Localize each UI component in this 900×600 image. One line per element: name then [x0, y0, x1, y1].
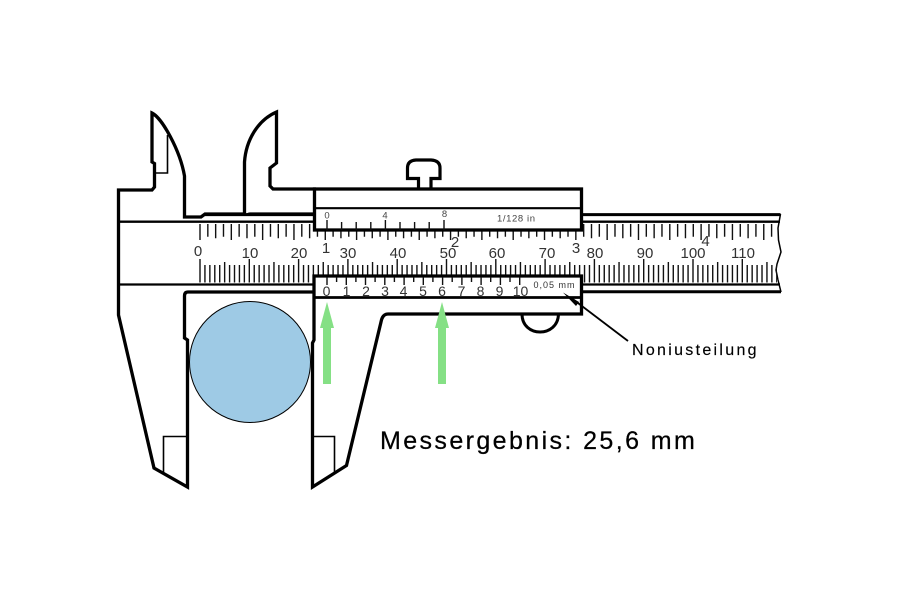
moving jaw outline: [312, 276, 582, 487]
infographic: vernier caliper reading: [116, 110, 782, 490]
vernier slide upper window: [314, 189, 582, 230]
vernier slide lower window and moving jaw: [312, 276, 582, 487]
millimetre scale numbers: 50: [440, 245, 456, 262]
label: Noniusteilung: Noniusteilung: [632, 342, 759, 359]
green arrow at vernier zero: [320, 302, 334, 384]
millimetre vernier numbers: 5: [419, 283, 427, 299]
millimetre vernier numbers: 3: [381, 283, 389, 299]
inch vernier numbers: 8: [442, 209, 447, 220]
caliper body with fixed jaws: [118, 112, 781, 487]
millimetre scale numbers: 30: [340, 245, 356, 262]
millimetre vernier numbers: 10: [513, 283, 528, 299]
millimetre scale numbers: 20: [291, 245, 307, 262]
millimetre vernier numbers: 6: [438, 283, 446, 299]
inch scale numbers: 1: [322, 240, 330, 257]
moving jaw detail: [312, 436, 334, 474]
inch scale numbers: 3: [572, 240, 580, 257]
leader arrow to vernier scale: [563, 292, 628, 341]
millimetre scale numbers: 0: [194, 243, 202, 260]
inch scale numbers: [322, 233, 710, 257]
upper window divider: [314, 207, 582, 209]
millimetre vernier numbers: 8: [477, 283, 485, 299]
depth slider loop: [522, 314, 558, 332]
millimetre vernier ticks: [327, 277, 520, 285]
millimetre scale numbers: 110: [731, 245, 755, 262]
lower window divider: [314, 296, 582, 299]
millimetre scale numbers: 60: [489, 245, 505, 262]
fixed jaw outline: [118, 113, 314, 487]
sliding thumb knob: [408, 160, 440, 189]
millimetre vernier numbers: 4: [400, 283, 408, 299]
ruler broken right edge: [776, 214, 781, 292]
millimetre scale ticks: [200, 259, 787, 282]
measured object: blue circle: [190, 302, 310, 422]
millimetre vernier numbers: [323, 283, 528, 299]
upper window frame: [314, 189, 582, 230]
result: Messergebnis: Messergebnis: 25,6 mm: [380, 427, 697, 455]
inch scale numbers: 2: [451, 234, 459, 251]
inch vernier unit: 1/128 in: [497, 214, 536, 224]
jaw detail lines: [154, 135, 187, 473]
inch vernier numbers: [324, 209, 447, 222]
inch vernier ticks: [327, 220, 444, 230]
inch vernier numbers: 4: [382, 210, 388, 222]
millimetre scale numbers: [194, 243, 755, 262]
leader line: [570, 297, 628, 341]
millimetre scale numbers: 100: [680, 245, 706, 262]
ruler frame lines: [118, 222, 780, 284]
upper right jaw outline: [244, 112, 316, 214]
millimetre vernier numbers: 2: [362, 283, 370, 299]
millimetre scale numbers: 70: [539, 245, 555, 262]
millimetre vernier numbers: 9: [496, 283, 504, 299]
millimetre vernier numbers: 0: [323, 283, 331, 299]
millimetre scale numbers: 80: [587, 245, 603, 262]
millimetre scale numbers: 40: [390, 245, 406, 262]
millimetre scale numbers: 90: [637, 245, 653, 262]
millimetre vernier numbers: 7: [458, 283, 466, 299]
green arrow at vernier six: [435, 302, 449, 384]
millimetre scale numbers: 10: [242, 245, 258, 262]
inch vernier numbers: 0: [324, 210, 330, 222]
millimetre vernier unit: 0,05 mm: [534, 280, 576, 290]
inch scale numbers: 4: [701, 233, 710, 250]
inch scale ticks: [200, 224, 819, 240]
arrow head: [563, 292, 579, 306]
millimetre vernier numbers: 1: [343, 283, 351, 299]
